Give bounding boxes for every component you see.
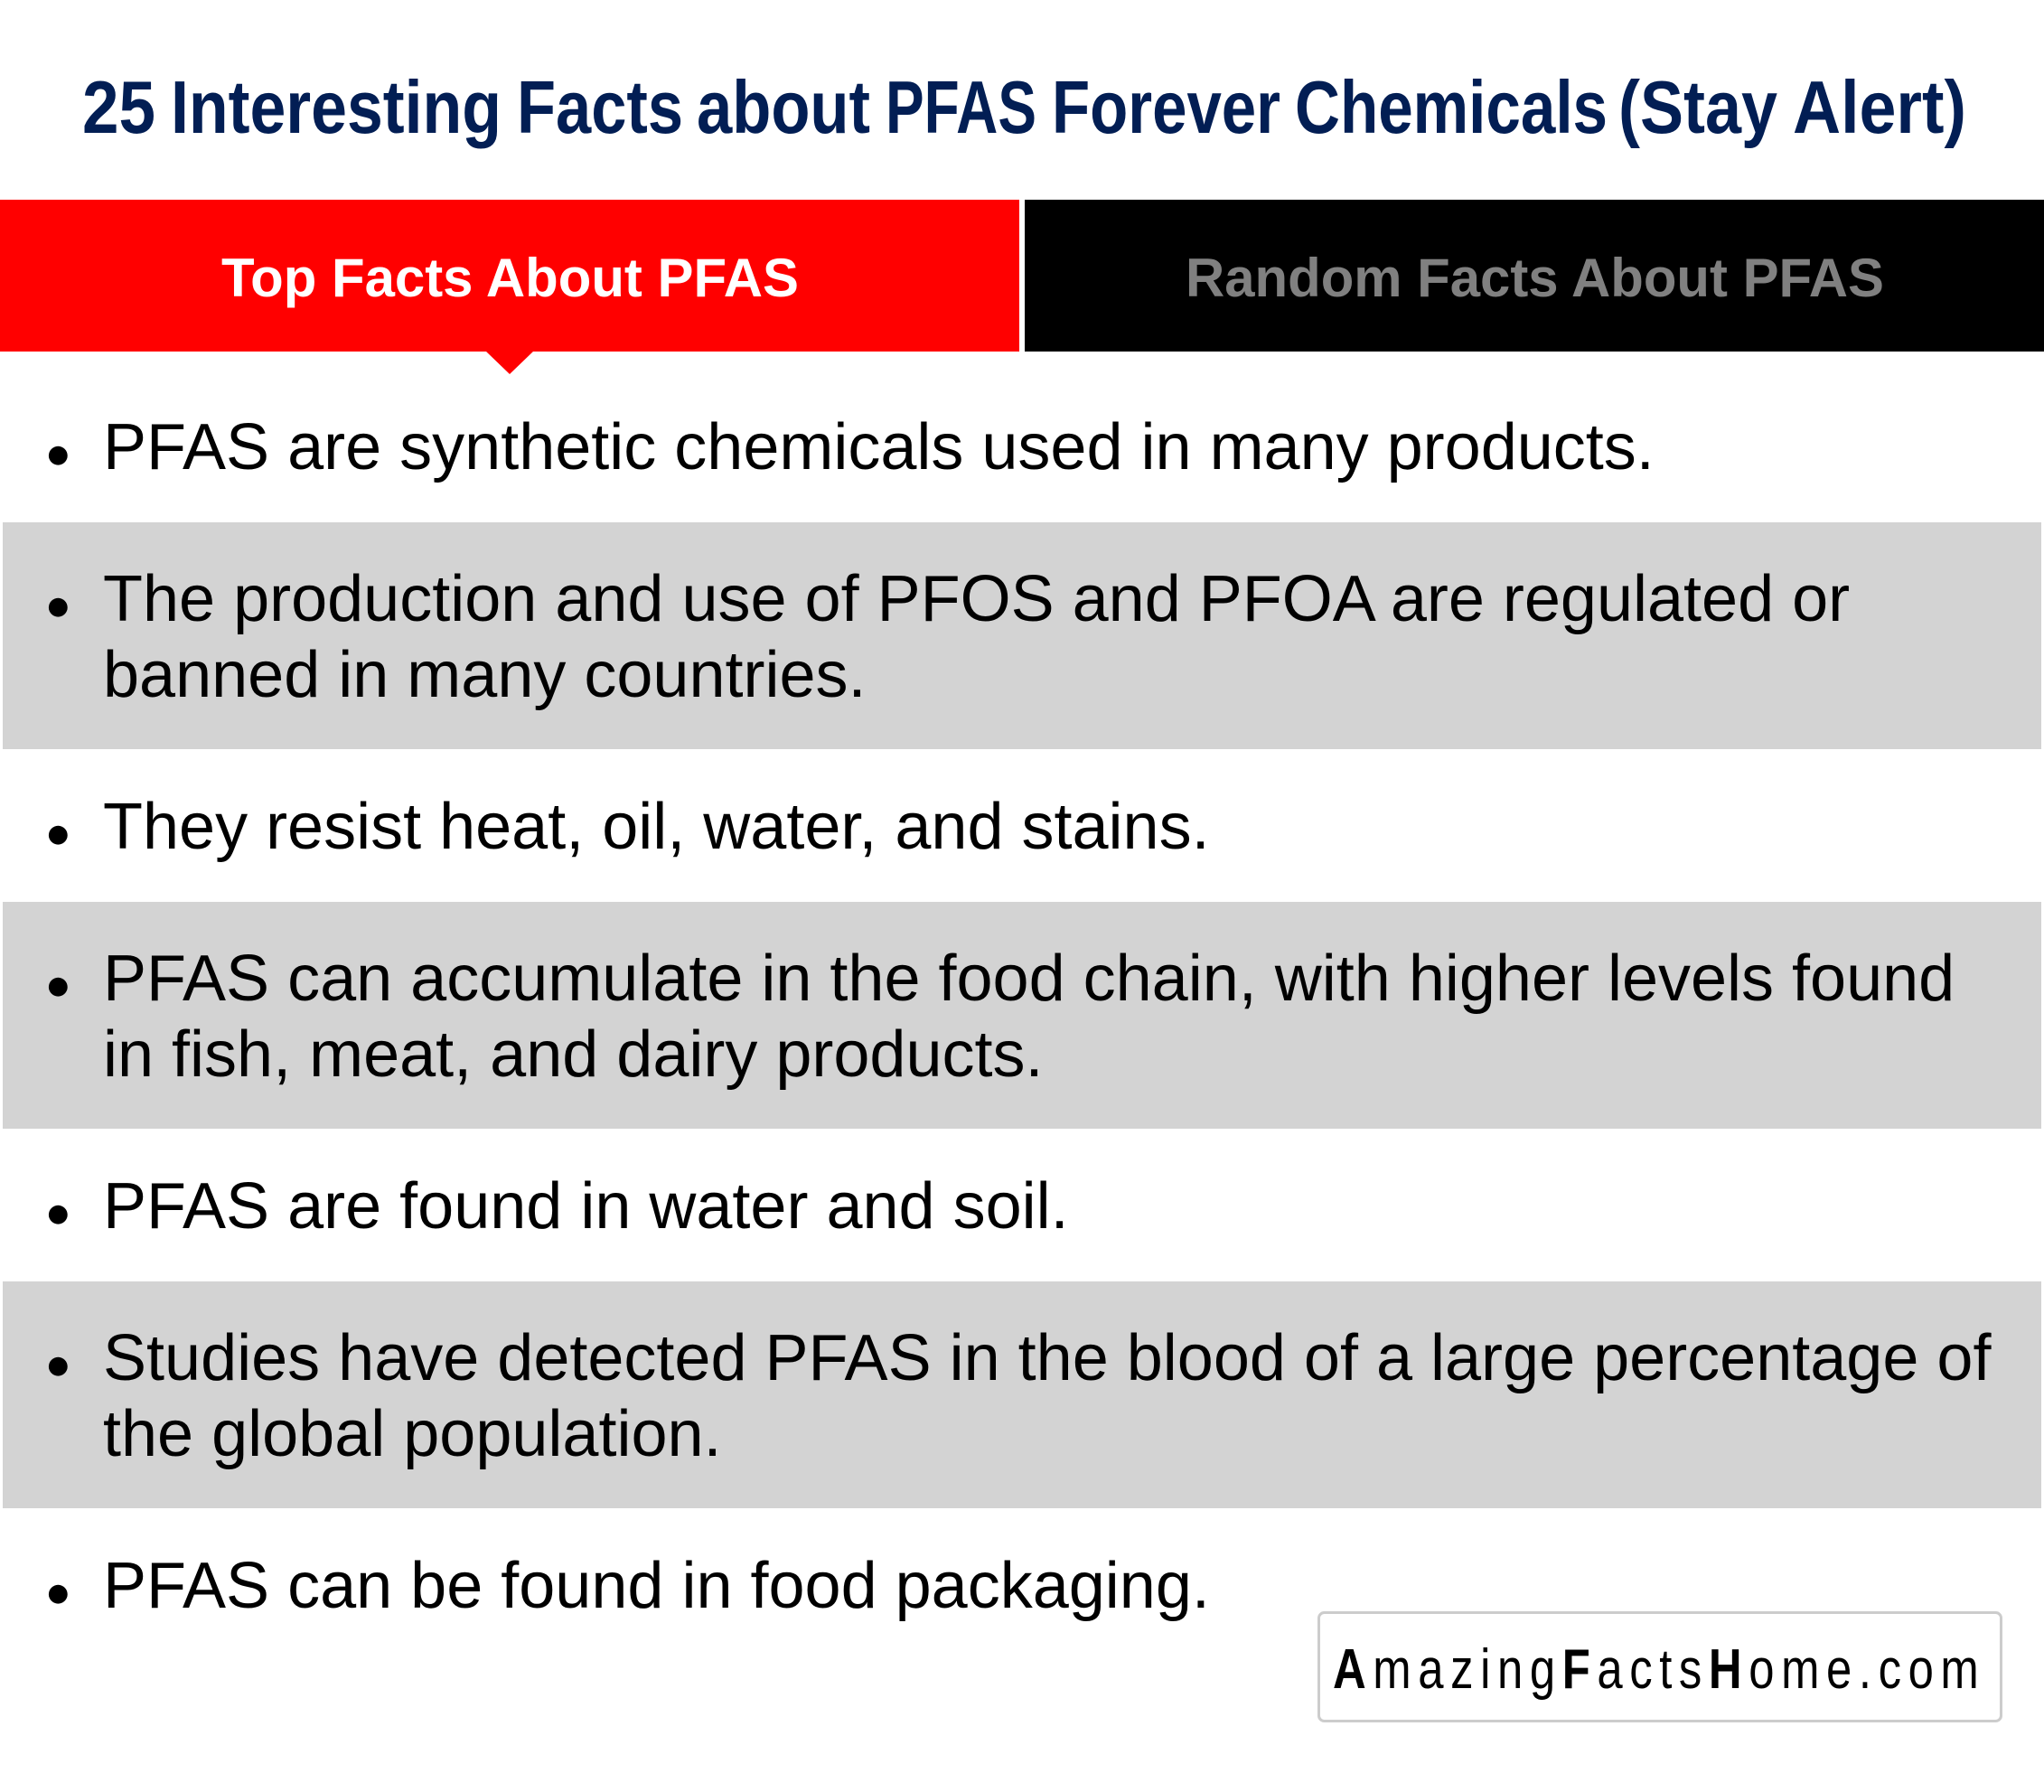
tab: top facts: Top Facts About PFAS xyxy=(221,248,799,308)
fact 4: PFAS can accumulate in the food chain, with higher levels found xyxy=(103,943,1955,1015)
fact 2: banned in many countries. xyxy=(103,639,867,711)
title: Interesting xyxy=(171,65,502,149)
fact 5: PFAS are found in water and soil. xyxy=(103,1170,1069,1243)
fact 1: PFAS are synthetic chemicals used in many products. xyxy=(103,411,1655,483)
tab: top facts xyxy=(0,200,1019,374)
title: Facts xyxy=(517,65,683,149)
watermark xyxy=(1319,1612,2001,1721)
title: (Stay xyxy=(1618,65,1777,149)
tab: random facts xyxy=(1025,200,2044,352)
fact 6 xyxy=(3,1281,2041,1508)
title xyxy=(82,65,1966,149)
fact 3: They resist heat, oil, water, and stains. xyxy=(103,791,1210,863)
fact 4: in fish, meat, and dairy products. xyxy=(103,1018,1044,1091)
tab: random facts: Random Facts About PFAS xyxy=(1186,248,1884,308)
fact 6: the global population. xyxy=(103,1398,722,1470)
watermark: AmazingFactsHome.com xyxy=(1333,1638,1985,1701)
title: about xyxy=(697,65,870,149)
title: Chemicals xyxy=(1295,65,1608,149)
fact 2: The production and use of PFOS and PFOA are regulated or xyxy=(103,563,1850,635)
title: Forever xyxy=(1052,65,1280,149)
fact 6: Studies have detected PFAS in the blood of a large percentage of xyxy=(103,1322,1992,1394)
title: 25 xyxy=(82,65,155,149)
fact 2 xyxy=(3,522,2041,749)
title: Alert) xyxy=(1793,65,1966,149)
fact 7: PFAS can be found in food packaging. xyxy=(103,1550,1210,1622)
fact 4 xyxy=(3,902,2041,1129)
title: PFAS xyxy=(886,65,1036,149)
